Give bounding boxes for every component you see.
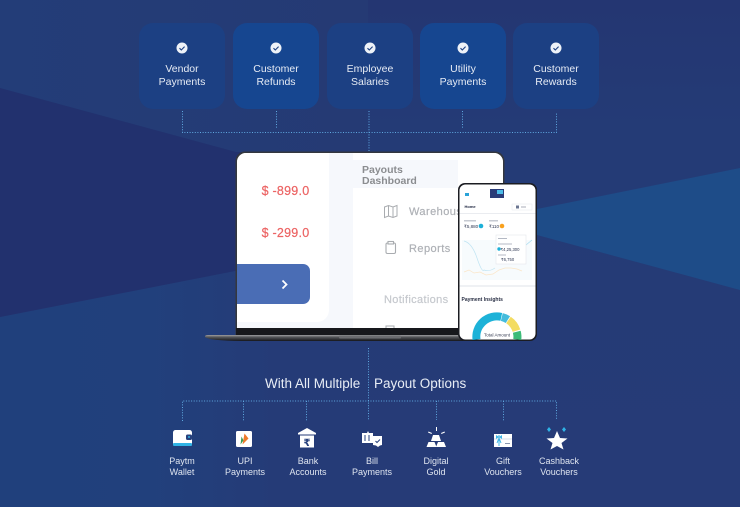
heading: payouts dashboard: Dashboard (362, 175, 417, 187)
option: upi payments (225, 431, 266, 477)
laptop screen (237, 153, 503, 329)
card: customer rewards: Customer (533, 63, 579, 75)
card: utility payments: Payments (440, 76, 486, 88)
icon: bank: ₹ (304, 438, 311, 449)
card: customer refunds: Refunds (256, 76, 296, 88)
amount: -899: $ -899.0 (262, 184, 309, 198)
option: paytm wallet: Wallet (170, 467, 195, 477)
phone logo (490, 189, 504, 198)
card: vendor payments (139, 23, 225, 109)
phone (458, 183, 537, 341)
option: paytm wallet: Paytm (169, 456, 195, 466)
card: utility payments (420, 23, 506, 109)
phone stats: ₹5,880 (464, 224, 479, 229)
icon: gift card (494, 434, 512, 447)
menu item: warehouse: Warehouse (409, 206, 469, 218)
phone home row (464, 204, 532, 210)
panel: payout categories (139, 23, 599, 109)
laptop hinge (339, 336, 401, 338)
phone donut chart (476, 316, 517, 340)
heading: payouts dashboard (362, 164, 417, 187)
laptop base (205, 335, 530, 341)
option: digital gold: Gold (426, 467, 446, 477)
card: vendor payments: Payments (159, 76, 205, 88)
card: vendor payments: Vendor (165, 63, 199, 75)
option: gift vouchers (484, 434, 522, 477)
option: bank accounts (289, 428, 327, 477)
option: gift vouchers: Gift (496, 456, 510, 466)
option: gift vouchers: Vouchers (484, 467, 522, 477)
option: digital gold: Digital (423, 456, 449, 466)
card: employee salaries (327, 23, 413, 109)
panel: payout options (169, 427, 580, 477)
phone stats (464, 220, 504, 229)
icon: upi (236, 431, 252, 447)
connector: laptop to options (182, 348, 556, 421)
heading: with all multiple payout options: Payout Options (374, 376, 467, 391)
icon: star (546, 427, 568, 450)
option: paytm wallet (169, 430, 195, 477)
card: customer rewards: Rewards (535, 76, 577, 88)
phone chart tooltip: ₹4,25,300 (500, 247, 520, 252)
phone stats: ₹110 (489, 224, 500, 229)
card: employee salaries: Employee (347, 63, 394, 75)
option: cashback vouchers (539, 427, 580, 477)
option: digital gold (423, 427, 449, 477)
icon: gold bars (426, 427, 446, 447)
laptop lower bezel (236, 328, 504, 335)
phone menu icon (465, 193, 469, 196)
option: upi payments: Payments (225, 467, 266, 477)
option: cashback vouchers: Cashback (539, 456, 580, 466)
option: cashback vouchers: Vouchers (540, 467, 578, 477)
icon: clipboard (386, 242, 396, 254)
option: bank accounts: Bank (298, 456, 319, 466)
phone chart tooltip: ₹6,750 (501, 257, 515, 262)
phone line chart (462, 240, 532, 280)
icon: wallet (173, 430, 192, 446)
menu heading: notifications: Notifications (384, 294, 449, 306)
card: employee salaries: Salaries (351, 76, 389, 88)
card: customer rewards (513, 23, 599, 109)
phone heading: payment insights: Payment Insights (462, 297, 503, 303)
option: upi payments: UPI (237, 456, 253, 466)
amount: -299: $ -299.0 (262, 226, 309, 240)
heading: payouts dashboard: Payouts (362, 164, 403, 176)
laptop bezel (236, 152, 504, 335)
phone chart tooltip (496, 235, 526, 264)
phone home row: Home (464, 204, 476, 209)
option: bill payments: Bill (366, 456, 378, 466)
icon: bills (362, 431, 382, 447)
button (237, 264, 310, 304)
partial menu icon (386, 326, 394, 329)
heading: with all multiple payout options: With All Multiple (265, 376, 360, 391)
option: bill payments: Payments (352, 467, 393, 477)
option: bank accounts: Accounts (289, 467, 327, 477)
icon: map (384, 206, 397, 218)
phone donut label: Total Amount (484, 332, 511, 338)
heading: with all multiple payout options (265, 376, 467, 391)
card: customer refunds: Customer (253, 63, 299, 75)
laptop (205, 152, 530, 341)
card: utility payments: Utility (450, 63, 477, 75)
connector: categories to laptop (182, 111, 556, 152)
menu item: reports: Reports (409, 243, 451, 255)
option: bill payments (352, 431, 393, 477)
card: customer refunds (233, 23, 319, 109)
